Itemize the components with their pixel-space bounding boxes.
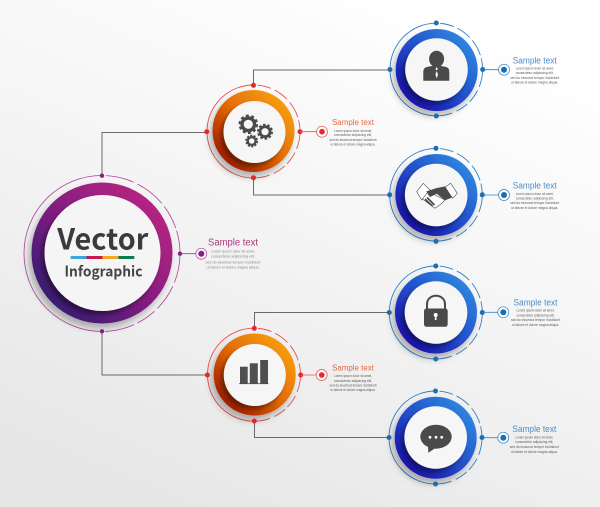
body text — [330, 129, 377, 146]
ring dots — [388, 20, 485, 118]
body text: sed do eiusmod tempor incididunt — [510, 201, 559, 205]
gradient ring — [212, 90, 294, 172]
blue node: chat bubble — [386, 388, 484, 486]
orange callout top — [300, 117, 377, 146]
heading: Sample text — [513, 180, 557, 190]
white disc — [405, 164, 468, 226]
body text: Lorem ipsum dolor sit amet, — [516, 192, 554, 196]
ring dots — [204, 83, 302, 180]
ring dots — [387, 146, 485, 244]
outer dashed ring — [24, 176, 180, 332]
body text: ut labore et dolore magna aliqua. — [511, 80, 558, 84]
blue callout 4 — [482, 424, 559, 454]
body text: sed do eiusmod tempor incididunt — [510, 445, 559, 449]
body text: consectetur adipiscing elit, — [334, 133, 372, 137]
target marker — [196, 248, 207, 259]
body text: Lorem ipsum dolor sit amet, — [334, 374, 372, 378]
body text: consectetur adipiscing elit, — [211, 255, 255, 259]
pointer — [300, 131, 317, 133]
icon: handshake — [417, 183, 457, 208]
icon: gears — [240, 116, 272, 147]
body text — [510, 192, 559, 210]
body text: consectetur adipiscing elit, — [334, 379, 372, 383]
body text — [510, 66, 559, 84]
body text: ut labore et dolore magna aliqua. — [511, 450, 558, 454]
body text: sed do eiusmod tempor incididunt — [206, 260, 261, 264]
body text: ut labore et dolore magna aliqua. — [330, 388, 376, 392]
body text: sed do eiusmod tempor incididunt — [330, 384, 377, 388]
gradient ring — [396, 29, 478, 111]
colour bar — [71, 256, 134, 259]
icon: bar chart — [239, 360, 268, 384]
title: Vector: Vector — [56, 216, 149, 258]
body text: Lorem ipsum dolor sit amet, — [516, 66, 554, 70]
gradient ring — [214, 334, 296, 416]
target marker — [498, 190, 510, 200]
white disc — [224, 101, 286, 163]
body text: consectetur adipiscing elit, — [515, 440, 553, 444]
connector lines — [102, 70, 390, 438]
heading: Sample text — [208, 237, 258, 248]
main node: Vector Infographic — [24, 174, 182, 333]
heading: Sample text — [332, 363, 375, 373]
body text: ut labore et dolore magna aliqua. — [512, 323, 559, 327]
gradient ring — [395, 272, 477, 354]
ring dots — [386, 388, 484, 486]
white disc — [404, 406, 467, 469]
body text: sed do eiusmod tempor incididunt — [330, 138, 377, 142]
body text — [206, 250, 261, 270]
white disc — [405, 281, 467, 344]
blue node: padlock — [387, 264, 485, 362]
ring dots — [387, 264, 485, 362]
heading: Sample text — [513, 55, 557, 65]
blue callout 3 — [482, 297, 560, 327]
outer dashed ring — [207, 85, 300, 178]
outer dashed ring — [389, 391, 482, 484]
heading: Sample text — [332, 117, 375, 127]
subtitle: Infographic: Infographic — [64, 261, 143, 282]
ring dots — [100, 174, 182, 333]
target marker — [498, 307, 509, 318]
body text — [511, 308, 560, 327]
body text — [330, 374, 377, 392]
blue callout 1 — [483, 55, 559, 84]
orange node: gears — [204, 83, 302, 180]
outer dashed ring — [390, 148, 482, 241]
pointer — [301, 374, 317, 376]
pointer — [482, 194, 499, 196]
target marker — [498, 64, 510, 75]
heading: Sample text — [514, 297, 558, 307]
body text: ut labore et dolore magna aliqua. — [206, 266, 260, 270]
orange callout bottom — [301, 363, 377, 392]
target marker — [498, 432, 509, 443]
blue callout 2 — [482, 180, 559, 210]
body text: sed do eiusmod tempor incididunt — [511, 318, 560, 322]
icon: padlock — [424, 296, 448, 327]
outer dashed ring — [208, 328, 300, 421]
body text: Lorem ipsum dolor sit amet, — [211, 250, 255, 254]
pointer — [180, 253, 196, 255]
body text: Lorem ipsum dolor sit amet, — [516, 308, 555, 312]
ring dots — [205, 326, 303, 424]
body text: consectetur adipiscing elit, — [516, 196, 554, 200]
icon: person — [423, 51, 449, 81]
pointer — [483, 69, 499, 71]
body text: ut labore et dolore magna aliqua. — [511, 206, 558, 210]
body text: Lorem ipsum dolor sit amet, — [515, 436, 553, 440]
target marker — [316, 126, 328, 137]
body text: ut labore et dolore magna aliqua. — [330, 142, 376, 146]
blue node: person — [388, 20, 485, 118]
pointer — [482, 437, 498, 439]
white disc — [44, 195, 160, 311]
target marker — [316, 370, 327, 380]
heading: Sample text — [512, 424, 557, 434]
body text — [510, 436, 559, 454]
body text: Lorem ipsum dolor sit amet, — [334, 129, 372, 133]
pointer — [482, 311, 498, 313]
icon: chat bubble — [420, 425, 452, 453]
body text: sed do eiusmod tempor incididunt — [510, 76, 559, 80]
outer dashed ring — [390, 23, 483, 116]
main callout — [180, 237, 261, 270]
body text: consectetur adipiscing elit, — [516, 71, 554, 75]
orange node: bar chart — [205, 326, 303, 424]
gradient ring — [32, 182, 172, 324]
white disc — [224, 344, 286, 406]
body text: consectetur adipiscing elit, — [516, 314, 555, 318]
gradient ring — [395, 397, 477, 479]
white disc — [405, 38, 468, 101]
gradient ring — [395, 154, 477, 236]
blue node: handshake — [387, 146, 485, 244]
outer dashed ring — [389, 266, 482, 359]
